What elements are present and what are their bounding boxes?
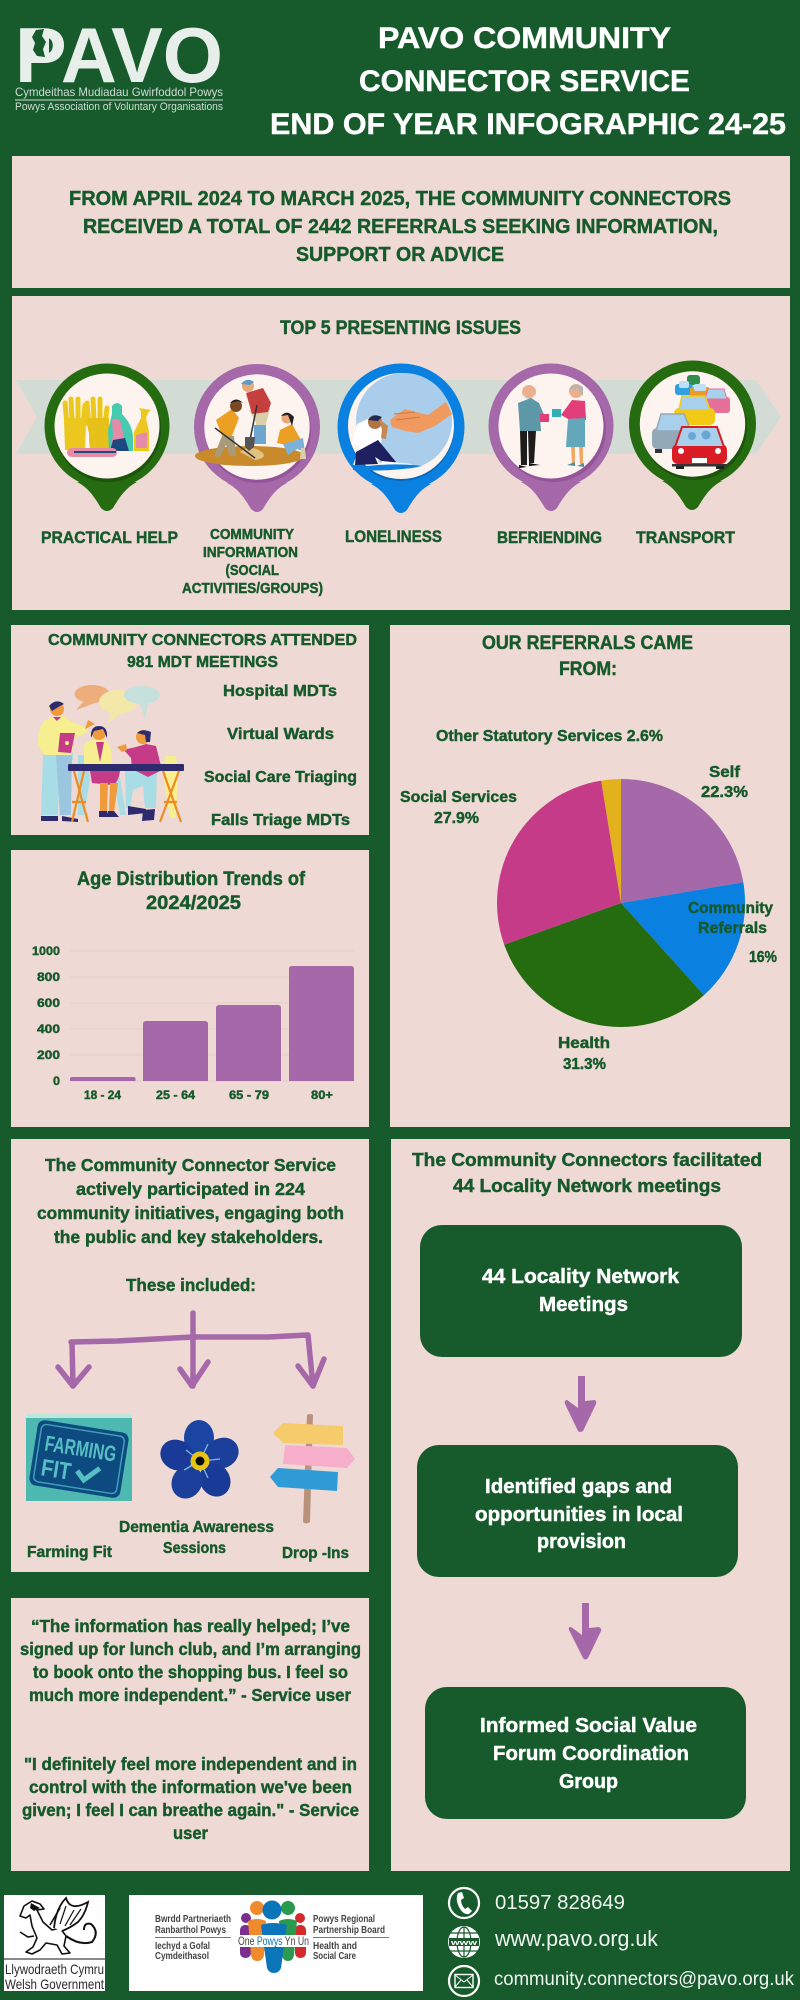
text: initiatives summary: the public and key stakeholders. bbox=[54, 1227, 323, 1247]
bar chart: age groups: 25 - 64 bbox=[156, 1088, 195, 1102]
icon: globe bbox=[448, 1926, 480, 1958]
panel: referral sources bbox=[390, 625, 790, 1127]
text: initiatives summary: actively participated in 224 bbox=[76, 1179, 305, 1199]
heading: age distribution: Age Distribution Trends of bbox=[77, 869, 306, 890]
icon: email bbox=[449, 1966, 479, 1996]
icon: signpost bbox=[270, 1414, 355, 1524]
pin: practical help bbox=[44, 364, 170, 511]
heading: referral sources: FROM: bbox=[559, 659, 617, 680]
quote: second service user: user bbox=[173, 1823, 208, 1843]
bar chart: age groups: 600 bbox=[37, 996, 60, 1010]
bar chart: age groups bbox=[32, 944, 354, 1102]
heading: locality network meetings: The Community Connectors facilitated bbox=[412, 1149, 762, 1170]
ribbon arrow bbox=[16, 380, 781, 454]
logo: Powys Regional Partnership Board: Cymdeithasol bbox=[155, 1951, 209, 1962]
label: community referrals bbox=[688, 900, 777, 966]
title: CONNECTOR SERVICE bbox=[359, 65, 690, 98]
image: farming fit badge: FIT bbox=[39, 1454, 73, 1486]
heading: MDT meetings bbox=[48, 632, 357, 671]
pin: loneliness bbox=[338, 364, 464, 513]
label: self: 22.3% bbox=[701, 784, 748, 801]
logo: Welsh Government: Llywodraeth Cymru bbox=[5, 1961, 104, 1977]
bar chart: age groups: 1000 bbox=[32, 944, 60, 958]
heading: MDT meetings: COMMUNITY CONNECTORS ATTENDED bbox=[48, 632, 357, 649]
panel: community initiatives bbox=[11, 1139, 369, 1572]
logo: Powys Regional Partnership Board: Ranbarthol Powys bbox=[155, 1925, 226, 1936]
pie chart: referral sources bbox=[497, 779, 745, 1027]
icon: globe: www bbox=[449, 1940, 478, 1947]
bar chart: age groups: 65 - 79 bbox=[229, 1088, 269, 1102]
bar chart: age groups: 0 bbox=[53, 1074, 60, 1088]
label: drop-ins: Drop -Ins bbox=[282, 1545, 349, 1562]
pin: community information bbox=[194, 364, 320, 512]
heading: locality network meetings: 44 Locality Network meetings bbox=[453, 1175, 721, 1196]
logo: Powys Regional Partnership Board: Powys Regional bbox=[313, 1914, 375, 1925]
quote: first service user bbox=[20, 1616, 361, 1705]
bar chart: age groups: 800 bbox=[37, 970, 60, 984]
label: community referrals: Community bbox=[688, 900, 773, 917]
heading: age distribution: 2024/2025 bbox=[146, 893, 241, 914]
label: self bbox=[701, 764, 748, 801]
heading: MDT meetings: 981 MDT MEETINGS bbox=[127, 654, 278, 671]
logo: Powys Regional Partnership Board: Partnership Board bbox=[313, 1925, 385, 1936]
label: dementia awareness sessions: Dementia Awareness bbox=[119, 1519, 274, 1536]
logo: Welsh Government: Welsh Government bbox=[5, 1976, 104, 1992]
quote: first service user: “The information has really helped; I’ve bbox=[31, 1616, 350, 1636]
panel: MDT meetings bbox=[11, 625, 369, 835]
arrow: first to second box bbox=[565, 1376, 596, 1432]
text: phone number: 01597 828649 bbox=[495, 1892, 625, 1914]
label: dementia awareness sessions bbox=[119, 1519, 274, 1557]
quote: first service user: signed up for lunch club, and I’m arranging bbox=[20, 1639, 361, 1659]
label: community referrals: Referrals bbox=[698, 920, 767, 937]
list: MDT types bbox=[204, 683, 357, 829]
label: other statutory services: Other Statutory Services 2.6% bbox=[436, 728, 663, 745]
icon: forget-me-not flower bbox=[155, 1420, 244, 1504]
pin: befriending bbox=[488, 364, 614, 511]
label: community information: INFORMATION bbox=[203, 545, 298, 561]
label: health: Health bbox=[558, 1035, 610, 1052]
label: community information: COMMUNITY bbox=[210, 527, 294, 543]
text: initiatives summary: These included: bbox=[126, 1275, 256, 1295]
logo: Powys Regional Partnership Board: Iechyd a Gofal bbox=[155, 1941, 210, 1952]
heading: top 5 presenting issues: TOP 5 PRESENTING ISSUES bbox=[280, 318, 521, 339]
text: initiatives summary: The Community Connector Service bbox=[45, 1155, 336, 1175]
logo: Powys Regional Partnership Board: Bwrdd Partneriaeth bbox=[155, 1914, 231, 1925]
label: social services: Social Services bbox=[400, 789, 517, 806]
box: identified gaps: Identified gaps and bbox=[485, 1476, 672, 1498]
label: loneliness: LONELINESS bbox=[345, 527, 442, 546]
image: farming fit badge bbox=[26, 1414, 132, 1501]
logo: PAVO: Cymdeithas Mudiadau Gwirfoddol Powys bbox=[15, 85, 223, 99]
box: social value forum: Informed Social Value bbox=[480, 1715, 697, 1737]
logo: PAVO: PAVO bbox=[15, 11, 223, 99]
heading: age distribution bbox=[77, 869, 306, 914]
label: social services: 27.9% bbox=[434, 810, 479, 827]
title: PAVO COMMUNITY bbox=[378, 22, 671, 55]
quote: first service user: to book onto the shopping bus. I feel so bbox=[33, 1662, 348, 1682]
panel: total referrals bbox=[12, 156, 790, 288]
panel: top 5 presenting issues bbox=[12, 296, 790, 610]
bar chart: age groups: 80+ bbox=[311, 1088, 333, 1102]
arrow: second to third box bbox=[569, 1603, 601, 1660]
logo: Welsh Government bbox=[4, 1895, 105, 1992]
panel: age distribution bbox=[11, 850, 369, 1127]
bar chart: age groups: 200 bbox=[37, 1048, 60, 1062]
box: 44 locality network meetings bbox=[420, 1225, 742, 1357]
list: MDT types: Virtual Wards bbox=[227, 726, 334, 743]
box: social value forum: Group bbox=[559, 1771, 618, 1793]
box: identified gaps bbox=[417, 1445, 738, 1577]
illustration: meeting around a table bbox=[38, 685, 184, 822]
box: 44 locality network meetings: 44 Locality Network bbox=[482, 1266, 680, 1288]
pin: transport bbox=[629, 360, 756, 510]
label: transport: TRANSPORT bbox=[636, 528, 736, 547]
label: self: Self bbox=[709, 764, 741, 781]
label: community information: (SOCIAL bbox=[226, 563, 279, 579]
list: MDT types: Falls Triage MDTs bbox=[211, 812, 350, 829]
panel: total referrals: FROM APRIL 2024 TO MARCH 2025, THE COMMUNITY CONNECTORS bbox=[69, 188, 731, 210]
bar chart: age groups: 400 bbox=[37, 1022, 60, 1036]
panel: locality network meetings bbox=[391, 1139, 790, 1871]
quote: second service user bbox=[22, 1754, 359, 1843]
logo: PAVO: Powys Association of Voluntary Organisations bbox=[15, 101, 223, 113]
panel: total referrals: RECEIVED A TOTAL OF 2442 REFERRALS SEEKING INFORMATION, bbox=[83, 216, 718, 238]
label: health bbox=[558, 1035, 610, 1073]
label: community information bbox=[182, 527, 323, 597]
text: email address: community.connectors@pavo.org.uk bbox=[494, 1969, 794, 1990]
heading: locality network meetings bbox=[412, 1149, 762, 1196]
quote: second service user: control with the information we've been bbox=[29, 1777, 352, 1797]
text: initiatives summary: community initiatives, engaging both bbox=[37, 1203, 344, 1223]
icon: phone bbox=[449, 1888, 479, 1918]
arrows: three branches bbox=[58, 1313, 324, 1386]
box: social value forum: Forum Coordination bbox=[493, 1743, 689, 1765]
title: END OF YEAR INFOGRAPHIC 24-25 bbox=[270, 108, 786, 141]
logo: Powys Regional Partnership Board: One Powys Yn Un bbox=[238, 1934, 309, 1948]
heading: referral sources: OUR REFERRALS CAME bbox=[482, 633, 693, 654]
panel: total referrals: SUPPORT OR ADVICE bbox=[296, 244, 504, 266]
label: health: 31.3% bbox=[563, 1056, 606, 1073]
label: social services bbox=[400, 789, 517, 827]
logo: Powys Regional Partnership Board: Health and bbox=[313, 1941, 357, 1952]
box: social value forum bbox=[425, 1687, 746, 1819]
box: identified gaps: opportunities in local bbox=[475, 1504, 683, 1526]
heading: referral sources bbox=[482, 633, 693, 680]
label: community referrals: 16% bbox=[749, 949, 777, 966]
panel: service user quotes bbox=[11, 1598, 369, 1871]
box: 44 locality network meetings: Meetings bbox=[539, 1294, 628, 1316]
quote: second service user: given; I feel I can breathe again." - Service bbox=[22, 1800, 359, 1820]
list: MDT types: Social Care Triaging bbox=[204, 769, 357, 786]
text: initiatives summary bbox=[37, 1155, 344, 1295]
bar chart: age groups: 18 - 24 bbox=[84, 1088, 121, 1102]
quote: second service user: "I definitely feel more independent and in bbox=[24, 1754, 357, 1774]
label: dementia awareness sessions: Sessions bbox=[163, 1540, 226, 1557]
title bbox=[270, 22, 786, 141]
label: farming fit: Farming Fit bbox=[27, 1544, 113, 1561]
box: identified gaps: provision bbox=[537, 1531, 626, 1553]
logo: Powys Regional Partnership Board: Social Care bbox=[313, 1951, 356, 1962]
image: farming fit badge: FARMING bbox=[43, 1431, 118, 1467]
text: website: www.pavo.org.uk bbox=[494, 1926, 659, 1951]
label: community information: ACTIVITIES/GROUPS) bbox=[182, 581, 323, 597]
label: practical help: PRACTICAL HELP bbox=[41, 528, 178, 547]
logo: Powys Regional Partnership Board bbox=[129, 1895, 423, 1991]
list: MDT types: Hospital MDTs bbox=[223, 683, 337, 700]
quote: first service user: much more independent.” - Service user bbox=[29, 1685, 351, 1705]
label: befriending: BEFRIENDING bbox=[497, 528, 602, 547]
